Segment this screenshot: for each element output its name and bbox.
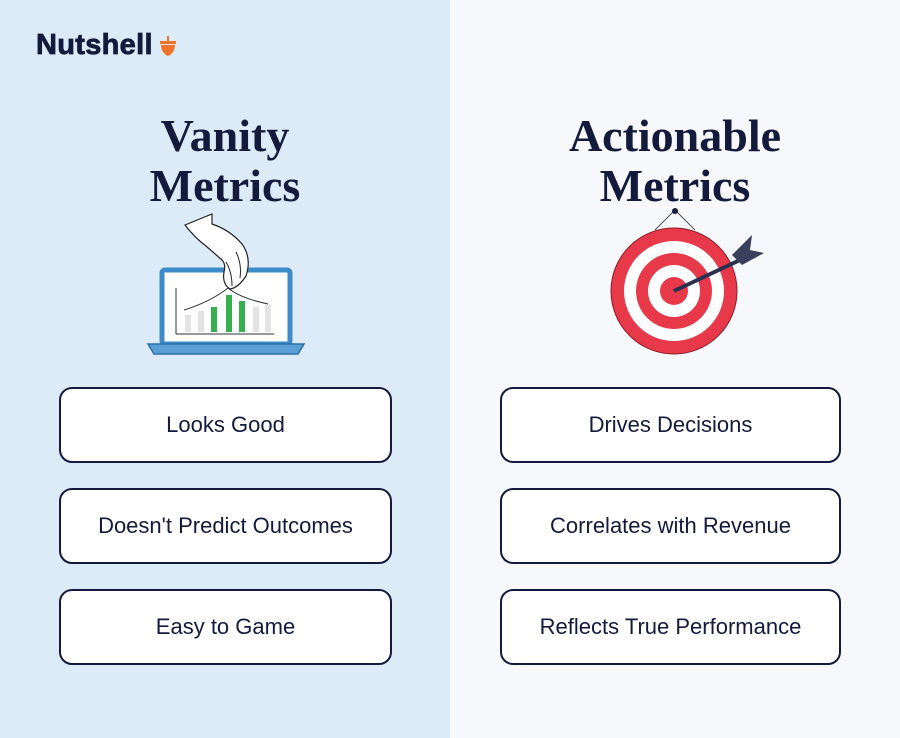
box: easy to game: Easy to Game [156, 614, 295, 639]
box: reflects true performance: Reflects True Performance [540, 614, 801, 639]
box: correlates with revenue [500, 488, 841, 564]
box: looks good: Looks Good [166, 412, 285, 437]
title: vanity metrics [150, 110, 300, 211]
logo: Nutshell [36, 29, 153, 61]
box: doesn't predict outcomes [59, 488, 392, 564]
box: easy to game [59, 589, 392, 665]
title: actionable metrics: Metrics [600, 160, 750, 211]
box: looks good [59, 387, 392, 463]
box: doesn't predict outcomes: Doesn't Predict Outcomes [98, 513, 353, 538]
icon: target with dart [610, 208, 764, 354]
box: reflects true performance [500, 589, 841, 665]
title: actionable metrics: Actionable [569, 110, 781, 161]
box: drives decisions [500, 387, 841, 463]
box: correlates with revenue: Correlates with Revenue [550, 513, 791, 538]
icon: laptop with hand [146, 213, 306, 355]
box: drives decisions: Drives Decisions [589, 412, 752, 437]
title: vanity metrics: Vanity [161, 110, 289, 161]
title: actionable metrics [569, 110, 781, 211]
title: vanity metrics: Metrics [150, 160, 300, 211]
